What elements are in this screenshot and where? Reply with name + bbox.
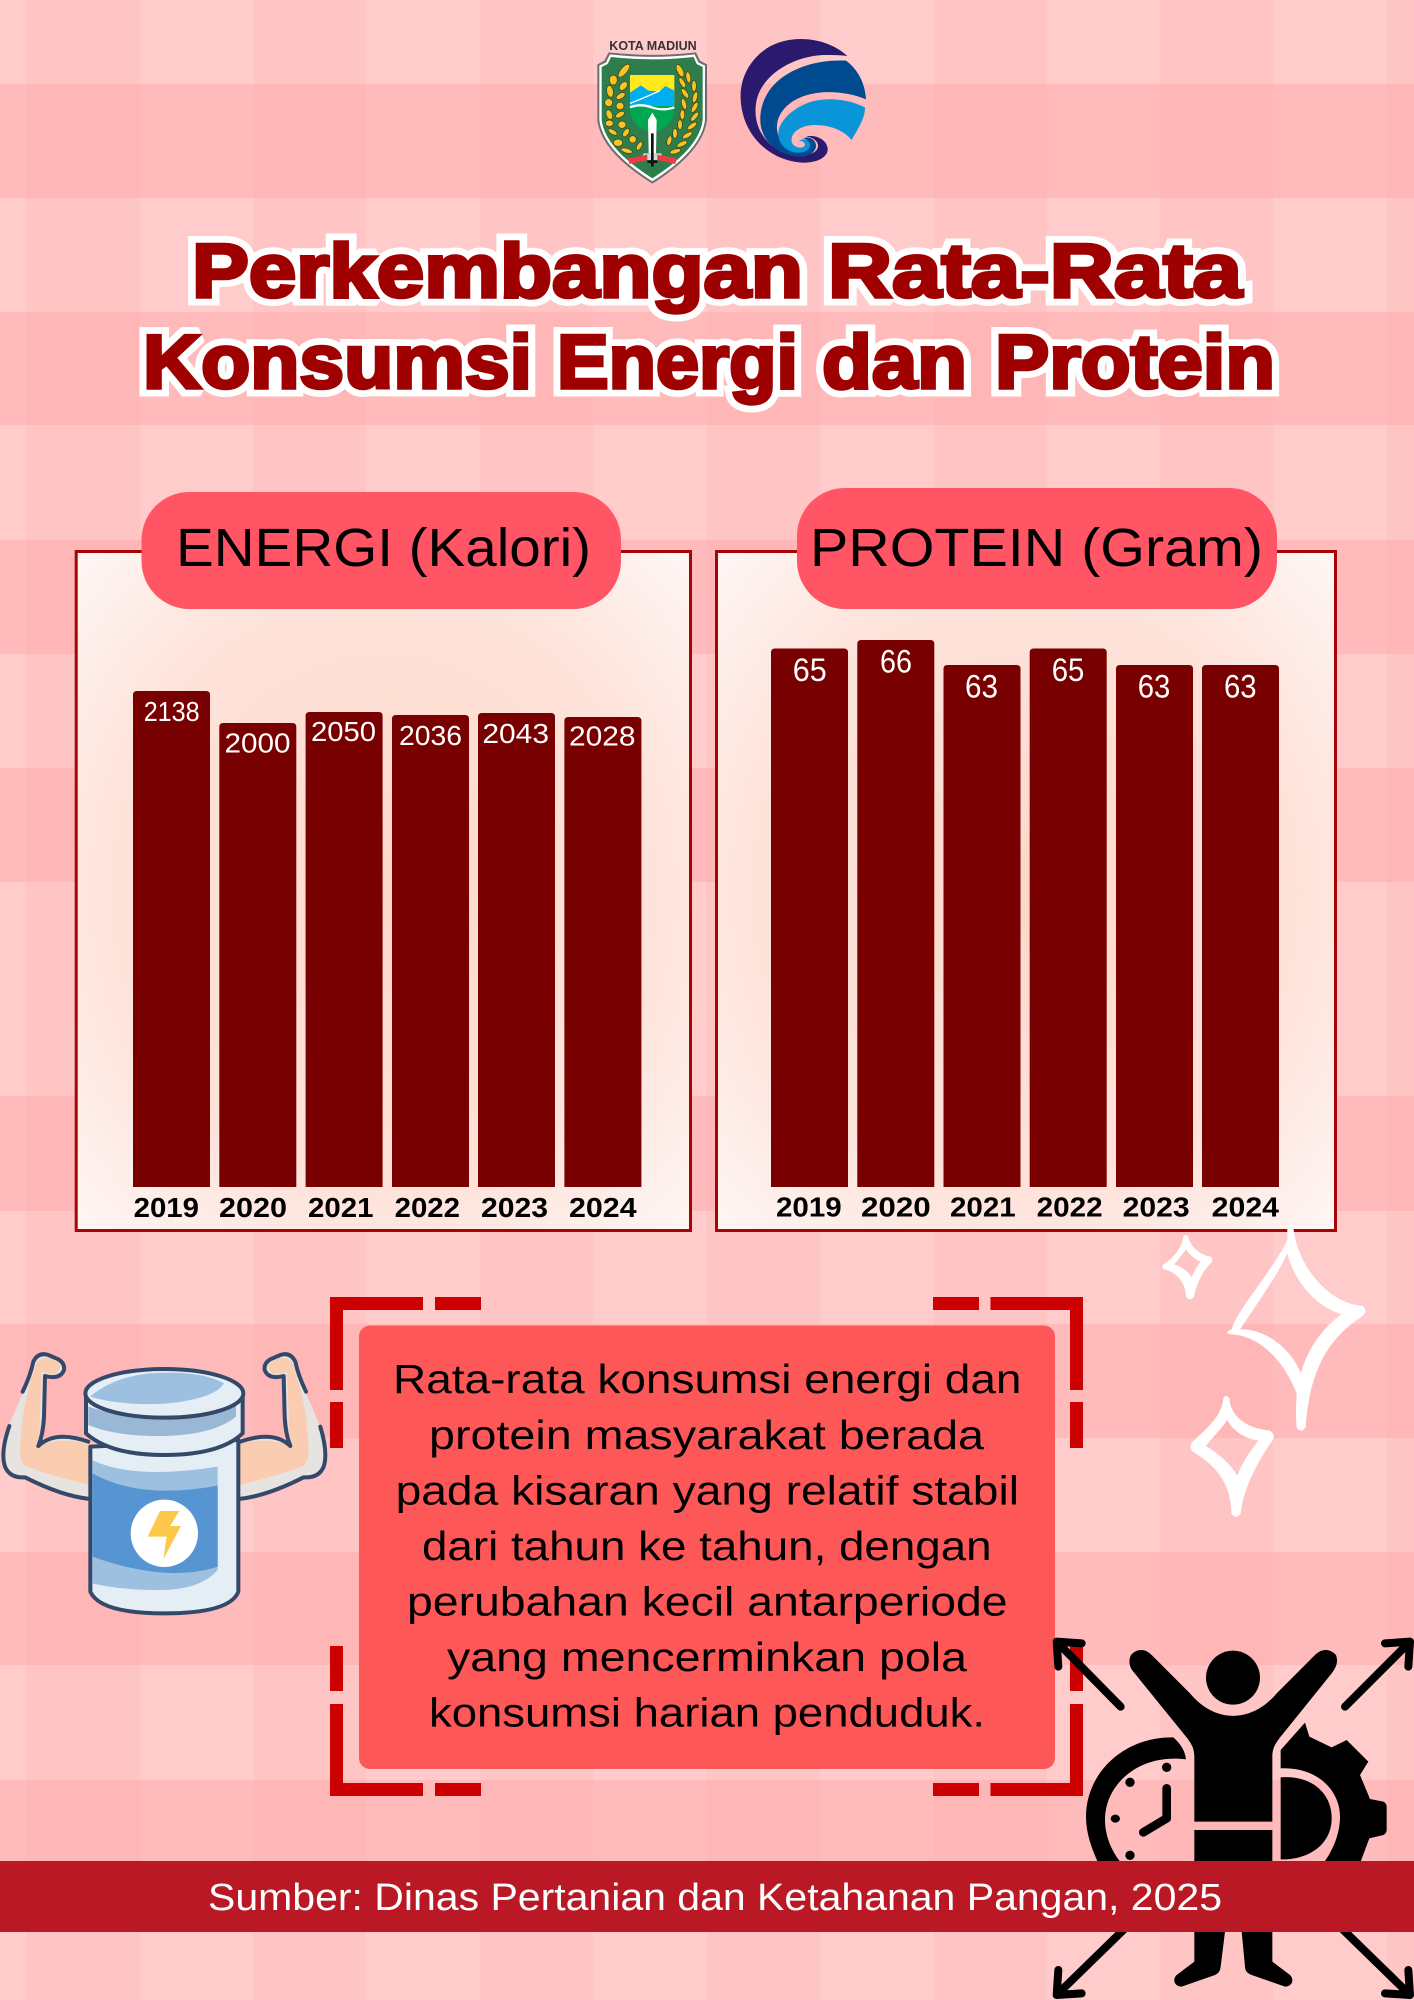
bar chart: energy: [133, 691, 641, 1223]
arrows: [1057, 1642, 1410, 1995]
title thickening layer: [143, 229, 1275, 405]
summary text: yang mencerminkan pola: [447, 1634, 967, 1680]
jar body: [90, 1440, 238, 1613]
summary text: pada kisaran yang relatif stabil: [396, 1468, 1019, 1514]
corner brackets: [330, 1297, 1083, 1796]
heading pill: energy: [142, 492, 621, 609]
bar chart: energy: 2023: [481, 1192, 548, 1223]
panel frame: protein: [716, 552, 1336, 1230]
summary text: Rata-rata konsumsi energi dan: [393, 1356, 1022, 1402]
bar chart: protein: 2022: [1037, 1192, 1103, 1223]
bar chart: protein: 65: [1052, 652, 1084, 688]
bar chart: energy: 2138: [144, 696, 200, 727]
icon: flexing supplement jar: [3, 1354, 325, 1613]
source bar: Sumber: Dinas Pertanian dan Ketahanan Pangan, 2025: [208, 1877, 1222, 1919]
title: [143, 229, 1275, 405]
summary text: perubahan kecil antarperiode: [407, 1578, 1008, 1624]
bar chart: energy: 2000: [224, 728, 290, 759]
heading pill: energy: ENERGI (Kalori): [176, 518, 591, 578]
bar chart: energy: 2019: [134, 1192, 199, 1223]
title thickening layer: Protein: [995, 320, 1275, 405]
title thickening layer: dan: [822, 320, 967, 405]
summary text: dari tahun ke tahun, dengan: [422, 1523, 992, 1569]
bar chart: protein: 2023: [1123, 1192, 1190, 1223]
title: Perkembangan: [192, 229, 803, 314]
bar chart: protein: 63: [1224, 669, 1257, 705]
bar chart: protein: 63: [1138, 669, 1170, 705]
title thickening layer: Energi: [557, 320, 798, 405]
logo: Kota Madiun shield: KOTA MADIUN: [609, 38, 697, 53]
title: Energi: [557, 320, 798, 405]
clock: [1086, 1737, 1186, 1863]
logo: Komdigi wave mark: [741, 39, 866, 163]
person: [1129, 1650, 1337, 1987]
bar chart: energy: 2024: [569, 1192, 637, 1223]
panel: protein chart: [716, 488, 1336, 1230]
text box with dashed corner brackets: [330, 1297, 1083, 1796]
bar chart: energy: 2020: [219, 1192, 287, 1223]
icon: person with clock, gear and arrows: [1057, 1642, 1410, 1995]
title: Protein: [995, 320, 1275, 405]
bar chart: protein: 2024: [1212, 1192, 1279, 1223]
bar chart: protein: 2021: [950, 1192, 1016, 1223]
summary text: [393, 1356, 1022, 1736]
bar chart: protein: 2019: [776, 1192, 842, 1223]
summary text: protein masyarakat berada: [429, 1412, 984, 1458]
bar chart: protein: 63: [965, 669, 998, 705]
bar chart: energy: 2028: [569, 721, 636, 752]
jar lid: [85, 1369, 243, 1455]
bar chart: energy: 2022: [395, 1192, 460, 1223]
title: Konsumsi: [143, 320, 532, 405]
title thickening layer: Konsumsi: [143, 320, 532, 405]
source bar: [0, 1861, 1414, 1932]
bar chart: energy: 2050: [311, 716, 376, 747]
summary text: konsumsi harian penduduk.: [429, 1690, 985, 1736]
bar chart: energy: 2043: [482, 718, 549, 749]
title thickening layer: Perkembangan: [192, 229, 803, 314]
bar chart: energy: 2021: [308, 1192, 374, 1223]
left arm: [3, 1354, 90, 1499]
icon: sparkles: [1162, 1225, 1365, 1517]
bar chart: protein: 65: [793, 652, 827, 688]
title thickening layer: Rata-Rata: [828, 229, 1243, 314]
bar chart: protein: 66: [880, 644, 912, 680]
title: dan: [822, 320, 967, 405]
heading pill: protein: [797, 488, 1277, 609]
right arm: [239, 1354, 325, 1499]
heading pill: protein: PROTEIN (Gram): [810, 518, 1263, 578]
logo: Kota Madiun shield: [597, 38, 707, 184]
bar chart: protein: [771, 640, 1279, 1223]
panel: energy chart: [76, 492, 690, 1230]
bar chart: protein: 2020: [861, 1192, 931, 1223]
panel frame: energy: [76, 552, 690, 1230]
text box background: [359, 1326, 1055, 1769]
bar chart: energy: 2036: [399, 720, 462, 751]
gear: [1281, 1723, 1387, 1863]
title: Rata-Rata: [828, 229, 1243, 314]
